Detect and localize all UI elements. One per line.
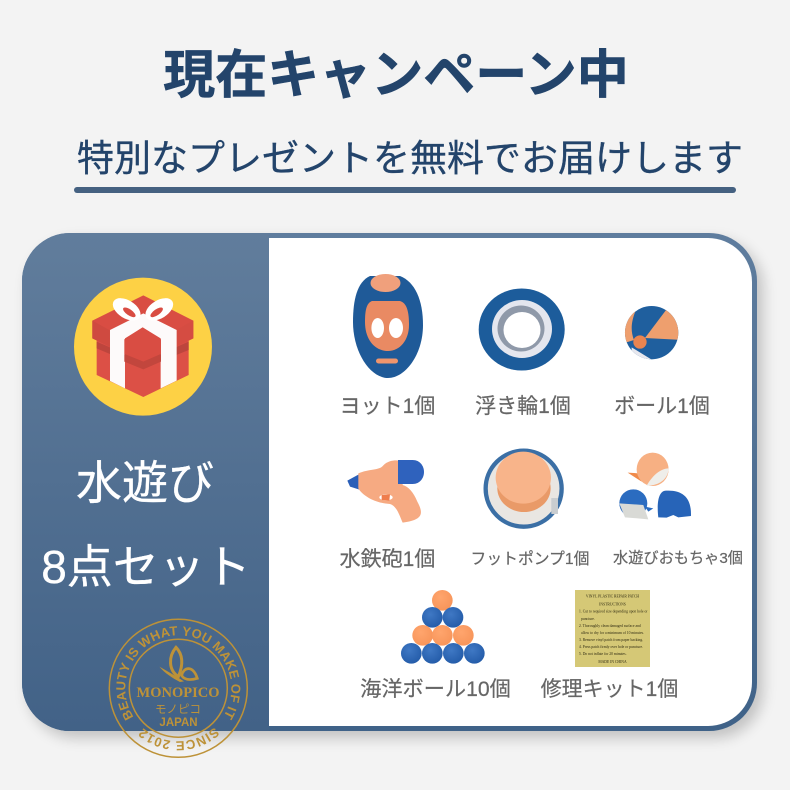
- icon: repair patch: [575, 590, 650, 667]
- label: 修理キット1個: 修理キット1個: [541, 678, 678, 701]
- icon: repair patch: MADE IN CHINA: [598, 660, 627, 664]
- logo: MONOPICO seal: [108, 618, 248, 758]
- icon: repair patch: VINYL PLASTIC REPAIR PATCH: [586, 594, 639, 598]
- panel: campaign set: [22, 233, 763, 738]
- icon: repair patch: INSTRUCTIONS: [599, 602, 626, 606]
- icon: foot pump: [486, 451, 562, 527]
- label: ボール1個: ボール1個: [614, 395, 710, 418]
- logo: MONOPICO seal: SINCE 2012: [139, 728, 219, 750]
- sidebar heading: 8点セット: 8点セット: [41, 541, 251, 593]
- icon: bath toys: [619, 453, 691, 519]
- panel: left sidebar: [22, 233, 269, 731]
- toy: blue whale back: [658, 491, 691, 518]
- icon: repair patch: 1. Cut to required size depending upon hole or: [579, 610, 648, 614]
- logo: MONOPICO seal: JAPAN: [159, 717, 198, 729]
- label: 海洋ボール10個: 海洋ボール10個: [360, 677, 511, 701]
- icon: water gun: [347, 460, 424, 523]
- icon: repair patch: puncture.: [581, 617, 595, 621]
- icon: repair patch: 5. Do not inflate for 20 minutes.: [579, 652, 627, 656]
- toy: peach whale: [628, 453, 669, 486]
- icon: ocean balls: [401, 590, 485, 664]
- icon: repair patch: 4. Press patch firmly over hole or puncture.: [579, 645, 643, 649]
- icon: repair patch: 3. Remove vinyl patch from paper backing.: [579, 638, 643, 642]
- icon: swim ring: [479, 288, 565, 370]
- label: フットポンプ1個: フットポンプ1個: [471, 550, 589, 568]
- underline: [74, 187, 736, 193]
- icon: gift box: [74, 278, 212, 416]
- logo: MONOPICO seal: モノピコ: [155, 703, 201, 716]
- logo: MONOPICO seal: MONOPICO: [137, 685, 219, 701]
- label: 水鉄砲1個: 水鉄砲1個: [340, 548, 435, 571]
- icon: repair patch: allow to dry for a minimum of 10 minutes.: [581, 631, 644, 635]
- gift bow: [109, 294, 177, 325]
- title: 現在キャンペーン中: [163, 47, 629, 105]
- sidebar heading: 水遊び: 水遊び: [76, 457, 214, 509]
- icon: repair patch: 2. Thoroughly clean damaged surface and: [579, 624, 641, 628]
- logo: MONOPICO seal: BEAUTY IS WHAT YOU MAKE OF IT: [116, 626, 240, 721]
- icon: beach ball: [624, 306, 678, 360]
- gift ribbon: [110, 313, 177, 388]
- icon: boat: [353, 274, 423, 378]
- toy: blue whale: [619, 489, 653, 519]
- logo: butterfly: [159, 647, 197, 682]
- subtitle: 特別なプレゼントを無料でお届けします: [77, 138, 743, 179]
- label: 水遊びおもちゃ3個: 水遊びおもちゃ3個: [613, 550, 743, 567]
- label: ヨット1個: ヨット1個: [340, 395, 435, 418]
- panel: contents list: [269, 238, 752, 726]
- label: 浮き輪1個: 浮き輪1個: [475, 395, 571, 418]
